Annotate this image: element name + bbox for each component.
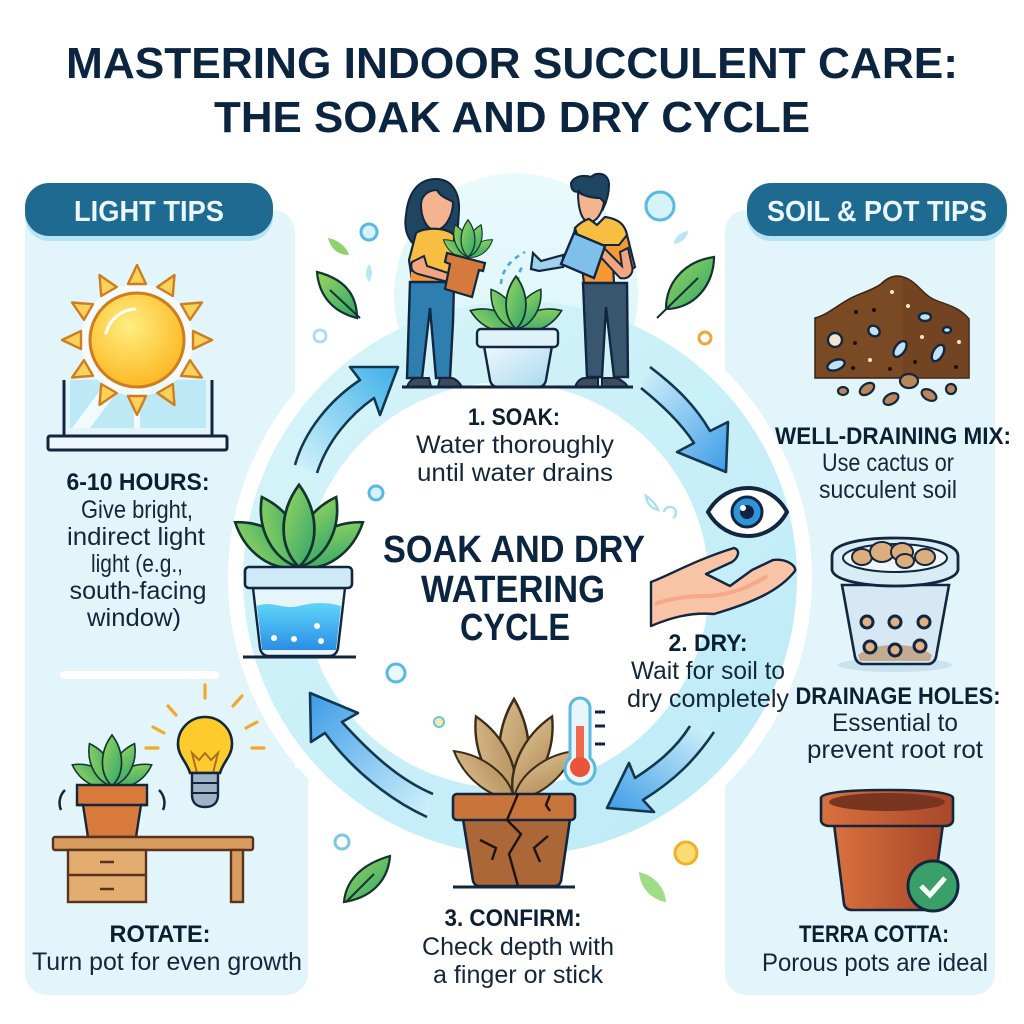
arrow: confirm to plant xyxy=(310,693,433,817)
text: hours of light xyxy=(66,469,210,632)
text: terra cotta xyxy=(762,921,988,977)
text: hours of light: Give bright, xyxy=(81,496,193,524)
panel: soil and pot tips xyxy=(725,210,995,995)
small terracotta pot xyxy=(445,253,485,297)
water drops xyxy=(501,252,525,284)
text: rotate xyxy=(32,921,302,976)
arrow outline: confirm to plant xyxy=(310,693,433,817)
text: terra cotta: Porous pots are ideal xyxy=(762,949,988,977)
heading: soil and pot tips xyxy=(747,183,1007,241)
heading: light tips: LIGHT TIPS xyxy=(74,196,224,228)
text: step 1 soak: Water thoroughly xyxy=(416,431,615,459)
pale circle behind gardeners xyxy=(394,173,638,417)
text: step 3 confirm xyxy=(422,905,614,989)
icon: pot with drainage holes xyxy=(832,538,958,672)
decoration: leaves and bubbles xyxy=(314,192,714,902)
heading: soil and pot tips: SOIL & POT TIPS xyxy=(767,196,987,228)
icon: gardeners watering plant xyxy=(402,174,635,387)
title: MASTERING INDOOR SUCCULENT CARE: xyxy=(66,39,958,88)
woman with plant xyxy=(405,179,462,387)
arrow outline: soak to dry xyxy=(641,367,728,472)
icon: dried plant in cracked pot xyxy=(447,699,581,887)
text: step 3 confirm: 3. CONFIRM: xyxy=(444,905,582,932)
text: step 1 soak: 1. SOAK: xyxy=(468,404,560,431)
center title: SOAK AND DRY xyxy=(383,529,645,571)
text: step 2 dry: dry completely xyxy=(627,685,790,713)
text: drainage holes: prevent root rot xyxy=(807,736,983,764)
watering can xyxy=(531,233,605,278)
arrow: soak to dry xyxy=(641,367,728,472)
icon: potted plant on desk with bulb xyxy=(53,685,264,902)
text: step 1 soak: until water drains xyxy=(417,459,613,487)
text: hours of light: window) xyxy=(86,604,181,632)
icon: open hand xyxy=(651,548,795,626)
icon: succulent in water pot xyxy=(227,485,371,657)
text: rotate: ROTATE: xyxy=(110,921,210,948)
cycle ring xyxy=(243,301,797,855)
text: hours of light: south-facing xyxy=(70,577,206,605)
center title xyxy=(383,529,645,649)
arrow: plant to soak xyxy=(295,367,398,473)
white halo around ring xyxy=(228,286,812,870)
central plant xyxy=(467,276,565,338)
text: well-draining mix: Use cactus or xyxy=(822,449,954,477)
icon: soil block xyxy=(815,276,969,407)
text: rotate: Turn pot for even growth xyxy=(32,948,302,976)
text: hours of light: indirect light xyxy=(67,523,205,551)
text: hours of light: 6-10 HOURS: xyxy=(66,469,210,496)
title: THE SOAK AND DRY CYCLE xyxy=(214,93,810,142)
text: well-draining mix: succulent soil xyxy=(819,476,957,504)
arrow: dry to confirm xyxy=(607,726,714,812)
text: step 3 confirm: a finger or stick xyxy=(433,961,603,989)
text: terra cotta: TERRA COTTA: xyxy=(799,921,949,948)
text: step 3 confirm: Check depth with xyxy=(422,933,614,961)
icon: thermometer xyxy=(565,698,605,784)
title xyxy=(66,39,958,142)
text: step 2 dry: 2. DRY: xyxy=(668,630,748,657)
icon: eye xyxy=(708,488,787,536)
text: well-draining mix: WELL-DRAINING MIX: xyxy=(775,423,1011,450)
heading: light tips xyxy=(25,183,273,241)
text: drainage holes: Essential to xyxy=(832,709,958,737)
small plant held xyxy=(440,220,496,262)
center title: CYCLE xyxy=(460,607,570,649)
icon: sun in window xyxy=(48,265,227,450)
text: step 2 dry: Wait for soil to xyxy=(631,657,785,685)
text: drainage holes xyxy=(796,683,1000,764)
central pot xyxy=(484,346,552,387)
icon: terra cotta pot with check badge xyxy=(821,790,958,911)
arrow outline: dry to confirm xyxy=(607,726,714,812)
center title: WATERING xyxy=(421,569,605,611)
text: drainage holes: DRAINAGE HOLES: xyxy=(796,683,1000,710)
man with watering can xyxy=(571,174,635,387)
text: step 2 dry xyxy=(627,630,790,713)
arrow outline: plant to soak xyxy=(295,367,398,473)
text: well-draining mix xyxy=(775,423,1011,504)
panel: light tips xyxy=(25,210,308,995)
text: step 1 soak xyxy=(416,404,615,487)
text: hours of light: light (e.g., xyxy=(91,550,183,578)
